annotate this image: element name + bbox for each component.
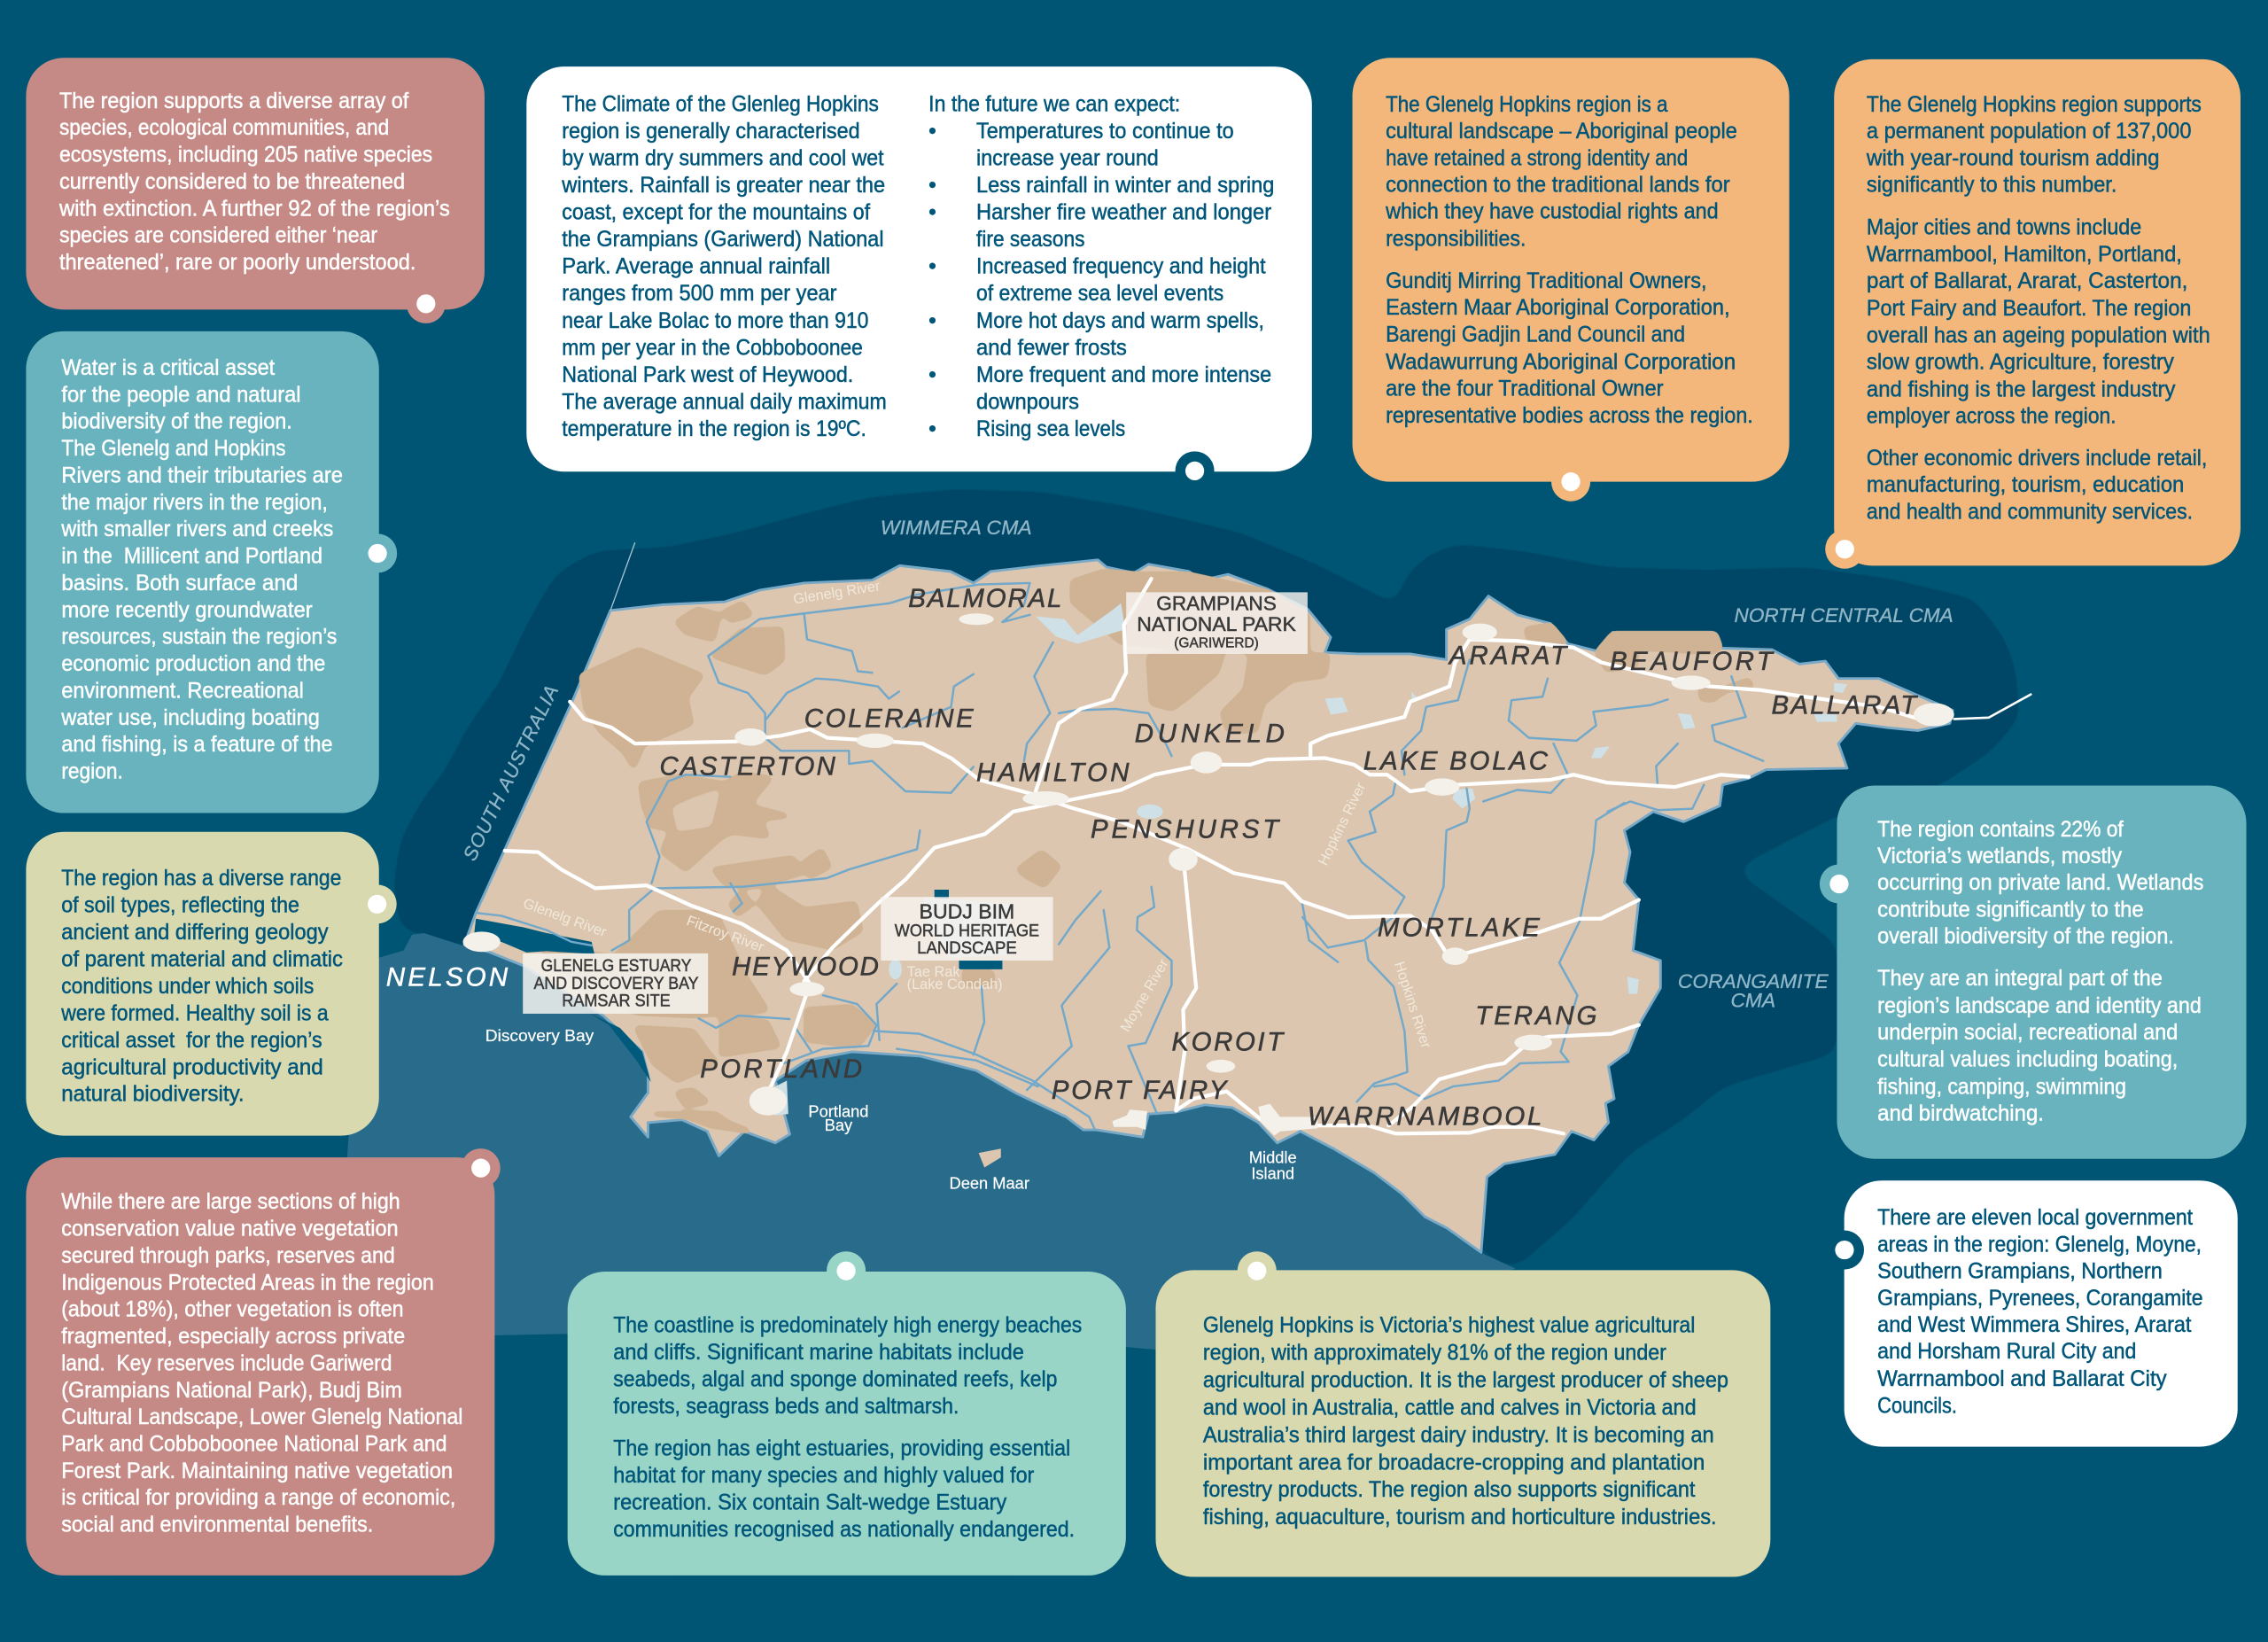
- map: water labels: Discovery Bay: [485, 1026, 594, 1045]
- text: cultural landscape: Eastern Maar Aboriginal Corporation,: [1386, 296, 1730, 320]
- text: native vegetation: While there are large sections of high: [61, 1190, 400, 1214]
- text: cultural landscape: which they have custodial rights and: [1385, 200, 1719, 224]
- map: river labels: [521, 578, 1434, 1051]
- text: future climate list: of extreme sea level events: [976, 282, 1223, 306]
- text: soils: agricultural productivity and: [61, 1055, 323, 1079]
- text: wetlands: The region contains 22% of: [1877, 818, 2124, 842]
- text: agriculture: agricultural production. It is the largest producer of sheep: [1203, 1368, 1728, 1392]
- text: cultural landscape: have retained a strong identity and: [1386, 146, 1688, 170]
- map: neighbouring CMA labels: CORANGAMITE: [1678, 970, 1829, 992]
- label: Glenelg Estuary and Discovery Bay Ramsar site: [523, 953, 708, 1014]
- map: rivers: [476, 583, 1763, 1130]
- map: towns: [462, 613, 1954, 1136]
- map: town labels: BALLARAT: [1772, 690, 1918, 720]
- map: river labels: Glenelg River: [521, 895, 610, 940]
- text: climate description: mm per year in the Cobboboonee: [562, 336, 863, 360]
- text: population and economy: Major cities and towns include: [1867, 216, 2141, 240]
- text: local government: There are eleven local government: [1877, 1206, 2193, 1230]
- text: native vegetation: [61, 1190, 462, 1537]
- connector dot: [462, 1148, 501, 1187]
- map: water labels: Bay: [825, 1116, 853, 1134]
- label: Budj Bim World Heritage Landscape: WORLD HERITAGE: [895, 922, 1039, 940]
- text: population and economy: and health and community services.: [1867, 500, 2193, 524]
- text: coastline: and cliffs. Significant marine habitats include: [613, 1341, 1024, 1365]
- label: Grampians National Park: NATIONAL PARK: [1137, 613, 1296, 635]
- text: soils: conditions under which soils: [61, 975, 314, 999]
- text: water: with smaller rivers and creeks: [60, 518, 333, 541]
- text: soils: The region has a diverse range: [61, 867, 341, 891]
- map: ocean: [347, 933, 1516, 1350]
- text: water: economic production and the: [61, 652, 325, 676]
- text: native vegetation: (about 18%), other vegetation is often: [61, 1298, 404, 1322]
- map: neighbouring CMA labels: WIMMERA CMA: [881, 517, 1032, 539]
- text: native vegetation: fragmented, especially across private: [61, 1325, 405, 1349]
- text: local government: Southern Grampians, Northern: [1877, 1260, 2163, 1284]
- panel: population and economy: [1825, 59, 2241, 569]
- text: climate description: Park. Average annual rainfall: [562, 255, 830, 279]
- text: population and economy: overall has an ageing population with: [1867, 323, 2210, 347]
- text: cultural landscape: are the four Traditional Owner: [1386, 377, 1664, 401]
- text: cultural landscape: cultural landscape – Aboriginal people: [1386, 120, 1737, 144]
- text: native vegetation: Indigenous Protected Areas in the region: [61, 1271, 434, 1295]
- text: coastline: habitat for many species and highly valued for: [613, 1464, 1034, 1488]
- text: future climate list: Less rainfall in winter and spring: [976, 174, 1274, 198]
- connector dot: [1551, 463, 1590, 502]
- text: biodiversity: species are considered either ‘near: [59, 224, 377, 248]
- text: wetlands: They are an integral part of the: [1877, 967, 2163, 991]
- text: future climate list: Rising sea levels: [976, 417, 1125, 441]
- map: river labels: Moyne River: [1117, 956, 1172, 1035]
- text: coastline: The coastline is predominately high energy beaches: [613, 1314, 1082, 1338]
- text: agriculture: [1203, 1314, 1728, 1529]
- text: native vegetation: (Grampians National Park), Budj Bim: [61, 1379, 402, 1403]
- text: cultural landscape: Barengi Gadjin Land Council and: [1386, 323, 1685, 346]
- connector dot: [1238, 1251, 1277, 1290]
- text: cultural landscape: The Glenelg Hopkins region is a: [1386, 93, 1668, 117]
- connector dot: [358, 884, 397, 923]
- map: state border line: [610, 542, 635, 611]
- panel: agriculture: [1155, 1251, 1770, 1577]
- text: climate description: region is generally characterised: [562, 120, 860, 144]
- connector dot: [827, 1251, 866, 1290]
- text: future climate list: •: [928, 417, 936, 441]
- text: population and economy: significantly to this number.: [1867, 173, 2117, 197]
- map: neighbouring CMA labels: SOUTH AUSTRALIA: [459, 681, 563, 864]
- panel: wetlands: [1820, 786, 2247, 1159]
- text: population and economy: slow growth. Agriculture, forestry: [1867, 350, 2174, 374]
- map: town labels: ARARAT: [1448, 641, 1568, 670]
- map: water labels: Deen Maar: [950, 1174, 1029, 1193]
- connector dot: [407, 284, 446, 323]
- text: future climate list: •: [928, 174, 936, 198]
- text: climate description: National Park west of Heywood.: [562, 363, 853, 387]
- text: water: the major rivers in the region,: [61, 491, 328, 515]
- text: agriculture: forestry products. The region also supports significant: [1203, 1478, 1696, 1502]
- text: native vegetation: secured through parks, reserves and: [61, 1244, 395, 1268]
- map: river labels: Hopkins River: [1316, 780, 1369, 868]
- text: soils: of soil types, reflecting the: [61, 894, 299, 918]
- map: town labels: LAKE BOLAC: [1363, 747, 1549, 776]
- map: town labels: PENSHURST: [1091, 814, 1280, 844]
- connector dot: [1825, 1231, 1864, 1270]
- map: river labels: Fitzroy River: [685, 913, 766, 955]
- map: water labels: Middle: [1249, 1148, 1297, 1166]
- text: future climate list: •: [928, 255, 936, 279]
- text: local government: [1877, 1206, 2203, 1418]
- text: cultural landscape: responsibilities.: [1386, 228, 1526, 252]
- text: soils: were formed. Healthy soil is a: [60, 1001, 329, 1025]
- map: river labels: Hopkins River: [1391, 960, 1434, 1051]
- text: population and economy: employer across the region.: [1867, 405, 2117, 429]
- text: coastline: communities recognised as nationally endangered.: [613, 1518, 1075, 1542]
- text: local government: and West Wimmera Shires, Ararat: [1877, 1313, 2192, 1337]
- text: agriculture: Australia’s third largest dairy industry. It is becoming an: [1203, 1423, 1714, 1447]
- map: neighbouring CMA labels: [459, 517, 1953, 1011]
- text: wetlands: and birdwatching.: [1877, 1102, 2044, 1126]
- text: climate description: by warm dry summers and cool wet: [562, 147, 884, 171]
- label: Grampians National Park: [1126, 592, 1308, 654]
- text: climate description: The Climate of the Glenleg Hopkins: [562, 93, 879, 117]
- text: water: for the people and natural: [61, 383, 301, 407]
- connector dot: [1176, 451, 1215, 490]
- panel: water: [26, 331, 397, 813]
- text: cultural landscape: connection to the traditional lands for: [1386, 173, 1730, 197]
- text: coastline: forests, seagrass beds and saltmarsh.: [613, 1395, 959, 1419]
- text: water: [60, 356, 343, 784]
- text: biodiversity: with extinction. A further 92 of the region’s: [58, 197, 450, 221]
- map: town labels: [386, 584, 1918, 1131]
- text: population and economy: a permanent population of 137,000: [1867, 120, 2191, 144]
- text: soils: of parent material and climatic: [61, 948, 343, 972]
- text: wetlands: fishing, camping, swimming: [1877, 1075, 2126, 1099]
- text: biodiversity: threatened’, rare or poorly understood.: [59, 251, 416, 275]
- text: population and economy: [1866, 93, 2210, 524]
- text: future climate list: Harsher fire weather and longer: [976, 201, 1271, 225]
- text: wetlands: occurring on private land. Wetlands: [1877, 871, 2203, 895]
- map: town labels: HEYWOOD: [732, 952, 879, 981]
- text: future climate list: downpours: [976, 390, 1079, 414]
- text: native vegetation: social and environmental benefits.: [61, 1514, 373, 1537]
- text: climate description: ranges from 500 mm per year: [562, 282, 836, 306]
- text: wetlands: region’s landscape and identity and: [1877, 994, 2202, 1018]
- map: town labels: PORT FAIRY: [1052, 1076, 1229, 1105]
- text: water: in the Millicent and Portland: [61, 545, 322, 569]
- map: water labels: Portland: [808, 1101, 868, 1120]
- text: native vegetation: conservation value native vegetation: [61, 1218, 399, 1241]
- text: water: biodiversity of the region.: [61, 410, 292, 434]
- text: climate description: the Grampians (Gariwerd) National: [562, 228, 884, 252]
- text: biodiversity: The region supports a diverse array of: [59, 89, 408, 113]
- map: town labels: DUNKELD: [1135, 720, 1285, 749]
- panel: biodiversity: [26, 58, 485, 323]
- text: agriculture: and wool in Australia, cattle and calves in Victoria and: [1203, 1397, 1697, 1420]
- map: town labels: COLERAINE: [804, 704, 974, 734]
- text: population and economy: Other economic drivers include retail,: [1867, 447, 2207, 471]
- text: agriculture: important area for broadacre-cropping and plantation: [1203, 1451, 1705, 1475]
- text: future climate list: Increased frequency and height: [976, 255, 1266, 279]
- map: town labels: PORTLAND: [700, 1054, 862, 1084]
- label: Glenelg Estuary and Discovery Bay Ramsar site: GLENELG ESTUARY: [541, 957, 692, 976]
- text: agriculture: fishing, aquaculture, tourism and horticulture industries.: [1203, 1506, 1717, 1529]
- text: soils: natural biodiversity.: [61, 1083, 245, 1107]
- map: town labels: TERANG: [1475, 1001, 1596, 1031]
- map: town labels: BALMORAL: [908, 584, 1061, 613]
- map: Deen Maar island: [979, 1148, 1001, 1168]
- text: future climate list: •: [928, 120, 936, 144]
- text: water: The Glenelg and Hopkins: [61, 437, 285, 461]
- text: cultural landscape: Gunditj Mirring Traditional Owners,: [1386, 269, 1707, 293]
- text: climate description: temperature in the region is 19ºC.: [562, 417, 866, 441]
- map: neighbouring CMA labels: CMA: [1730, 989, 1775, 1011]
- map: town labels: HAMILTON: [976, 759, 1130, 788]
- map: river labels: Tae Rak: [907, 964, 960, 980]
- text: wetlands: cultural values including boating,: [1877, 1047, 2178, 1071]
- text: biodiversity: [58, 89, 450, 275]
- text: local government: and Horsham Rural City and: [1877, 1340, 2136, 1364]
- text: population and economy: Warrnambool, Hamilton, Portland,: [1867, 243, 2182, 267]
- text: local government: Grampians, Pyrenees, Corangamite: [1877, 1287, 2203, 1311]
- text: future climate list: •: [928, 201, 936, 225]
- text: water: environment. Recreational: [61, 679, 304, 703]
- text: climate description: [561, 93, 887, 441]
- text: coastline: recreation. Six contain Salt-wedge Estuary: [613, 1491, 1007, 1515]
- connector dot: [1825, 530, 1864, 569]
- text: population and economy: Port Fairy and Beaufort. The region: [1867, 297, 2191, 321]
- text: population and economy: with year-round tourism adding: [1866, 146, 2160, 170]
- text: coastline: seabeds, algal and sponge dominated reefs, kelp: [613, 1368, 1057, 1392]
- text: future climate list: •: [928, 363, 936, 387]
- text: wetlands: overall biodiversity of the region.: [1877, 925, 2174, 949]
- text: future climate list: More frequent and more intense: [976, 363, 1271, 387]
- text: climate description: The average annual daily maximum: [562, 390, 887, 414]
- text: native vegetation: is critical for providing a range of economic,: [61, 1486, 455, 1510]
- text: native vegetation: land. Key reserves include Gariwerd: [61, 1351, 392, 1375]
- label: Budj Bim World Heritage Landscape: BUDJ BIM: [920, 900, 1014, 923]
- text: cultural landscape: representative bodies across the region.: [1386, 404, 1753, 428]
- text: climate description: winters. Rainfall is greater near the: [561, 174, 885, 198]
- text: future climate list: increase year round: [976, 147, 1159, 171]
- text: soils: critical asset for the region’s: [61, 1029, 322, 1053]
- map: region land: [464, 560, 1953, 1252]
- map: town labels: NELSON: [386, 963, 509, 992]
- text: climate description: coast, except for the mountains of: [562, 201, 870, 225]
- map: water labels: Island: [1251, 1164, 1294, 1183]
- text: native vegetation: Cultural Landscape, Lower Glenelg National: [61, 1405, 462, 1429]
- connector dot: [358, 533, 397, 573]
- text: future climate list: In the future we can expect:: [928, 93, 1180, 117]
- text: coastline: The region has eight estuaries, providing essential: [613, 1437, 1070, 1461]
- text: water: resources, sustain the region’s: [61, 626, 337, 650]
- panel: cultural landscape: [1353, 58, 1790, 502]
- text: wetlands: underpin social, recreational and: [1877, 1021, 2178, 1045]
- text: wetlands: Victoria’s wetlands, mostly: [1877, 844, 2123, 868]
- map: river labels: Glenelg River: [792, 578, 882, 608]
- panel: climate: [526, 66, 1312, 490]
- text: future climate list: Temperatures to continue to: [976, 120, 1234, 144]
- text: population and economy: The Glenelg Hopkins region supports: [1867, 93, 2202, 117]
- text: future climate list: •: [928, 309, 936, 333]
- label: Glenelg Estuary and Discovery Bay Ramsar site: RAMSAR SITE: [562, 992, 671, 1011]
- text: coastline: [613, 1314, 1082, 1542]
- text: climate description: near Lake Bolac to more than 910: [562, 309, 868, 333]
- text: local government: Councils.: [1877, 1394, 1957, 1418]
- map: town labels: KOROIT: [1171, 1027, 1285, 1056]
- text: water: Water is a critical asset: [61, 356, 275, 380]
- text: water: region.: [61, 760, 123, 784]
- panel: soils: [26, 832, 397, 1136]
- panel: local government: [1825, 1180, 2238, 1447]
- map: water labels: [485, 1026, 1297, 1193]
- text: population and economy: and fishing is the largest industry: [1867, 377, 2176, 401]
- text: local government: Warrnambool and Ballarat City: [1877, 1367, 2167, 1391]
- label: Budj Bim World Heritage Landscape: LANDSCAPE: [917, 939, 1017, 958]
- text: biodiversity: ecosystems, including 205 native species: [59, 144, 432, 167]
- text: biodiversity: species, ecological communities, and: [59, 116, 389, 140]
- text: population and economy: part of Ballarat, Ararat, Casterton,: [1867, 269, 2187, 293]
- text: water: Rivers and their tributaries are: [61, 463, 343, 487]
- text: native vegetation: Forest Park. Maintaining native vegetation: [61, 1459, 453, 1483]
- map: estuary water: [473, 890, 1002, 1082]
- label: Grampians National Park: GRAMPIANS: [1156, 593, 1277, 615]
- text: cultural landscape: Wadawurrung Aboriginal Corporation: [1386, 350, 1736, 374]
- text: water: more recently groundwater: [61, 598, 313, 622]
- map: town labels: CASTERTON: [659, 751, 836, 781]
- panel: native vegetation: [26, 1148, 501, 1576]
- map: lakes: [773, 603, 1847, 1116]
- panel: coastline: [568, 1251, 1126, 1576]
- label: Grampians National Park: (GARIWERD): [1174, 636, 1259, 651]
- text: wetlands: contribute significantly to the: [1877, 898, 2144, 922]
- map: neighbouring CMA dark region: [393, 489, 2020, 1269]
- text: biodiversity: currently considered to be threatened: [59, 170, 405, 194]
- text: future climate list: [928, 93, 1274, 441]
- text: water: and fishing, is a feature of the: [61, 733, 333, 757]
- label: Budj Bim World Heritage Landscape: [881, 897, 1053, 961]
- text: local government: areas in the region: Glenelg, Moyne,: [1877, 1233, 2202, 1257]
- map: neighbouring CMA labels: NORTH CENTRAL CMA: [1735, 604, 1953, 626]
- text: soils: [60, 867, 343, 1107]
- text: cultural landscape: [1385, 93, 1753, 428]
- connector dot: [1820, 864, 1859, 904]
- text: wetlands: [1877, 818, 2203, 1126]
- map: town labels: MORTLAKE: [1378, 913, 1540, 942]
- label: Glenelg Estuary and Discovery Bay Ramsar site: AND DISCOVERY BAY: [533, 975, 699, 993]
- text: soils: ancient and differing geology: [61, 921, 329, 945]
- map: town labels: BEAUFORT: [1610, 647, 1775, 676]
- text: agriculture: Glenelg Hopkins is Victoria’s highest value agricultural: [1203, 1314, 1695, 1338]
- text: water: basins. Both surface and: [61, 572, 298, 595]
- text: agriculture: region, with approximately 81% of the region under: [1203, 1342, 1666, 1366]
- map: town labels: WARRNAMBOOL: [1308, 1101, 1542, 1131]
- text: future climate list: More hot days and warm spells,: [976, 309, 1264, 333]
- text: water: water use, including boating: [60, 706, 320, 730]
- text: native vegetation: Park and Cobboboonee National Park and: [61, 1432, 447, 1456]
- text: future climate list: fire seasons: [976, 228, 1084, 252]
- text: population and economy: manufacturing, tourism, education: [1867, 473, 2184, 497]
- text: future climate list: and fewer frosts: [976, 336, 1127, 360]
- map: river labels: (Lake Condah): [907, 977, 1003, 992]
- map: elevated terrain: [541, 572, 1751, 1132]
- map: roads: [505, 579, 2031, 1133]
